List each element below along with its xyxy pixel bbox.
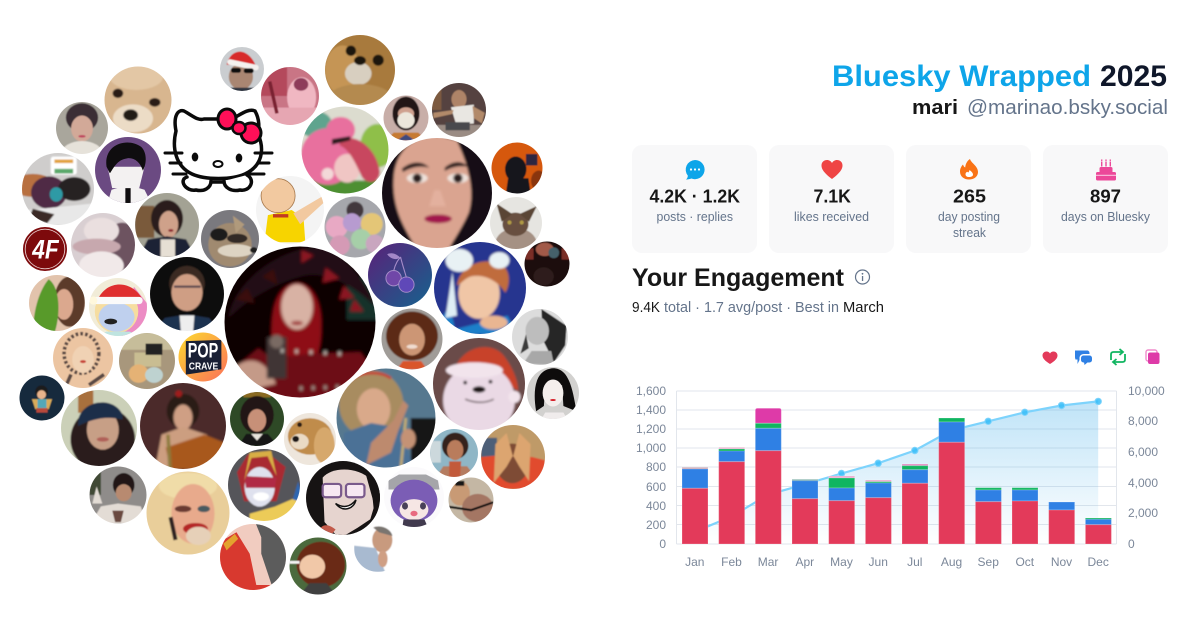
bar: Feb	[719, 447, 745, 544]
left axis labels: 400	[646, 499, 666, 513]
avatar: girl with purple glasses cartoon	[299, 454, 387, 542]
avatar: Pop Crave logo	[178, 332, 228, 382]
value: 897	[1090, 186, 1121, 206]
avatar: close-up skin photo	[442, 471, 500, 529]
bar: Jun	[865, 480, 891, 544]
avatar: sleeping woman with speech bubble	[22, 153, 94, 225]
icon: birthday cake	[1096, 160, 1116, 180]
left axis labels: 200	[646, 518, 666, 532]
avatar: large woman portrait	[382, 138, 492, 248]
avatar: golden dog	[284, 413, 336, 465]
bar: Aug	[939, 418, 965, 544]
avatar: Powerpuff girl with santa hat	[89, 278, 147, 336]
avatar: man at table	[432, 83, 486, 137]
right axis labels: 4,000	[1128, 476, 1158, 490]
left axis labels: 1,200	[636, 422, 666, 436]
stat card: days on Bluesky	[1043, 145, 1168, 253]
month labels: Sep	[978, 555, 999, 569]
left axis labels: 800	[646, 460, 666, 474]
right axis labels: 0	[1128, 537, 1135, 551]
left axis labels: 1,400	[636, 403, 666, 417]
avatar: black-haired drawing	[522, 362, 584, 424]
legend icon: likes	[1042, 352, 1058, 364]
right axis labels: 2,000	[1128, 506, 1158, 520]
bar: Jul	[902, 464, 928, 544]
bar: Sep	[975, 488, 1001, 544]
month labels	[685, 555, 1109, 569]
avatar: woman with halter top	[423, 422, 485, 484]
stat card: posts and replies	[632, 145, 757, 253]
left axis labels: 1,000	[636, 441, 666, 455]
cumulative area and line	[695, 398, 1101, 544]
bar: Dec	[1085, 518, 1111, 544]
avatar: brown cat	[490, 197, 542, 249]
avatar: anime maid with purple hair	[378, 461, 450, 533]
avatar: woman in red dress illustration	[220, 524, 286, 590]
left axis labels: 600	[646, 480, 666, 494]
avatar: Caillou cartoon	[256, 176, 324, 244]
avatar: camera portrait	[524, 242, 570, 286]
left axis labels: 0	[659, 537, 666, 551]
right axis labels: 8,000	[1128, 414, 1158, 428]
avatar: Lickitung	[302, 106, 388, 194]
month labels: Oct	[1015, 555, 1035, 569]
month labels: Mar	[758, 555, 778, 569]
avatar: 4F logo: 4F	[31, 235, 59, 265]
engagement summary: March	[843, 300, 884, 316]
avatar: santa hat with sunglasses	[220, 47, 264, 91]
avatar: plush toys	[324, 196, 386, 258]
icon: heart	[822, 160, 842, 179]
avatar: man in white shirt	[90, 466, 146, 524]
avatar cluster	[11, 25, 584, 603]
avatar: desk with pillows	[119, 333, 175, 389]
chart grid	[676, 391, 1116, 544]
label: streak	[953, 226, 987, 240]
left axis labels: 1,600	[636, 384, 666, 398]
icon: chat bubble	[686, 160, 705, 180]
avatar: pomeranian	[104, 66, 172, 134]
avatar: main gothic portrait	[224, 246, 376, 398]
avatar: Hello Kitty	[165, 109, 272, 191]
icon: flame	[960, 159, 978, 180]
avatar: masked villain cartoon	[228, 449, 300, 521]
legend	[1042, 349, 1160, 365]
month labels: Jul	[907, 555, 922, 569]
avatar: woman with green leaf	[29, 275, 85, 331]
avatar: raccoon with eyepatch	[201, 210, 259, 268]
month labels: Feb	[721, 555, 742, 569]
value: 4.2K · 1.2K	[650, 186, 741, 206]
label: posts · replies	[656, 210, 733, 224]
user handle: mari	[912, 97, 958, 119]
right axis labels: 10,000	[1128, 384, 1165, 398]
avatar: painted woman	[140, 383, 226, 469]
avatar: young man with glasses	[150, 257, 224, 331]
value: 7.1K	[814, 186, 852, 206]
title: Bluesky Wrapped	[832, 60, 1091, 93]
avatar: Chun-Li illustration	[434, 242, 526, 334]
month labels: Jan	[685, 555, 704, 569]
avatar: black cat in orange wig	[492, 142, 542, 194]
value: 265	[953, 186, 986, 206]
avatar: woman with curly hair	[382, 308, 442, 370]
left axis labels	[636, 384, 666, 551]
bar: Oct	[1012, 488, 1038, 544]
combo chart: monthly engagement	[636, 384, 1165, 569]
label: day posting	[938, 210, 1000, 224]
label: likes received	[794, 210, 869, 224]
legend icon: quotes	[1146, 350, 1160, 364]
title: 2025	[1100, 60, 1167, 93]
month labels: Jun	[869, 555, 888, 569]
heading: Your Engagement: Your Engagement	[632, 264, 845, 292]
avatar: cherries	[368, 243, 432, 307]
bar: Apr	[792, 479, 818, 544]
month labels: May	[830, 555, 853, 569]
avatar: woman in navy cap	[61, 390, 137, 466]
label: days on Bluesky	[1061, 210, 1151, 224]
avatar: woman in film still	[230, 392, 284, 446]
bar: May	[829, 476, 855, 544]
bar: Mar	[755, 408, 781, 544]
icon: info	[856, 270, 870, 284]
engagement summary: total · 1.7 avg/post · Best in	[664, 300, 839, 316]
avatar: blurry pale cat	[71, 213, 135, 277]
avatar: polar bear with santa hat	[419, 324, 539, 444]
avatar: pencil sketch of woman	[53, 328, 113, 388]
user handle: @marinao.bsky.social	[967, 97, 1168, 119]
month labels: Apr	[795, 555, 814, 569]
right axis labels	[1128, 384, 1165, 551]
avatar: woman with dark hair	[135, 193, 199, 257]
right axis labels: 6,000	[1128, 445, 1158, 459]
bar: Nov	[1049, 502, 1075, 544]
label	[938, 210, 1000, 240]
avatar: 4F logo	[23, 227, 67, 271]
avatar: Katya with cigarettes	[146, 472, 230, 554]
avatar: girl with red curly hair cartoon	[281, 529, 355, 603]
month labels: Aug	[941, 555, 962, 569]
stacked bars	[682, 408, 1111, 544]
avatar: pink illustration	[261, 67, 319, 125]
engagement summary: 9.4K	[632, 300, 660, 316]
stat card: day posting streak	[906, 145, 1031, 253]
month labels: Dec	[1088, 555, 1109, 569]
avatar: childhood photo	[322, 354, 450, 482]
legend icon: replies	[1075, 350, 1092, 365]
legend icon: reposts	[1111, 349, 1125, 365]
avatar: smiling man cutout	[347, 517, 409, 579]
avatar: woman in face mask	[384, 96, 428, 140]
stat card: likes received	[769, 145, 894, 253]
avatar: purple cartoon boy	[95, 137, 161, 203]
avatar: woman on grey	[56, 102, 108, 154]
avatar: brown dog	[325, 35, 395, 105]
month labels: Nov	[1051, 555, 1072, 569]
avatar: black-and-white portrait	[504, 301, 576, 373]
avatar: Luffy figure	[20, 376, 64, 420]
avatar: man covering face	[471, 415, 555, 499]
bar: Jan	[682, 467, 708, 544]
